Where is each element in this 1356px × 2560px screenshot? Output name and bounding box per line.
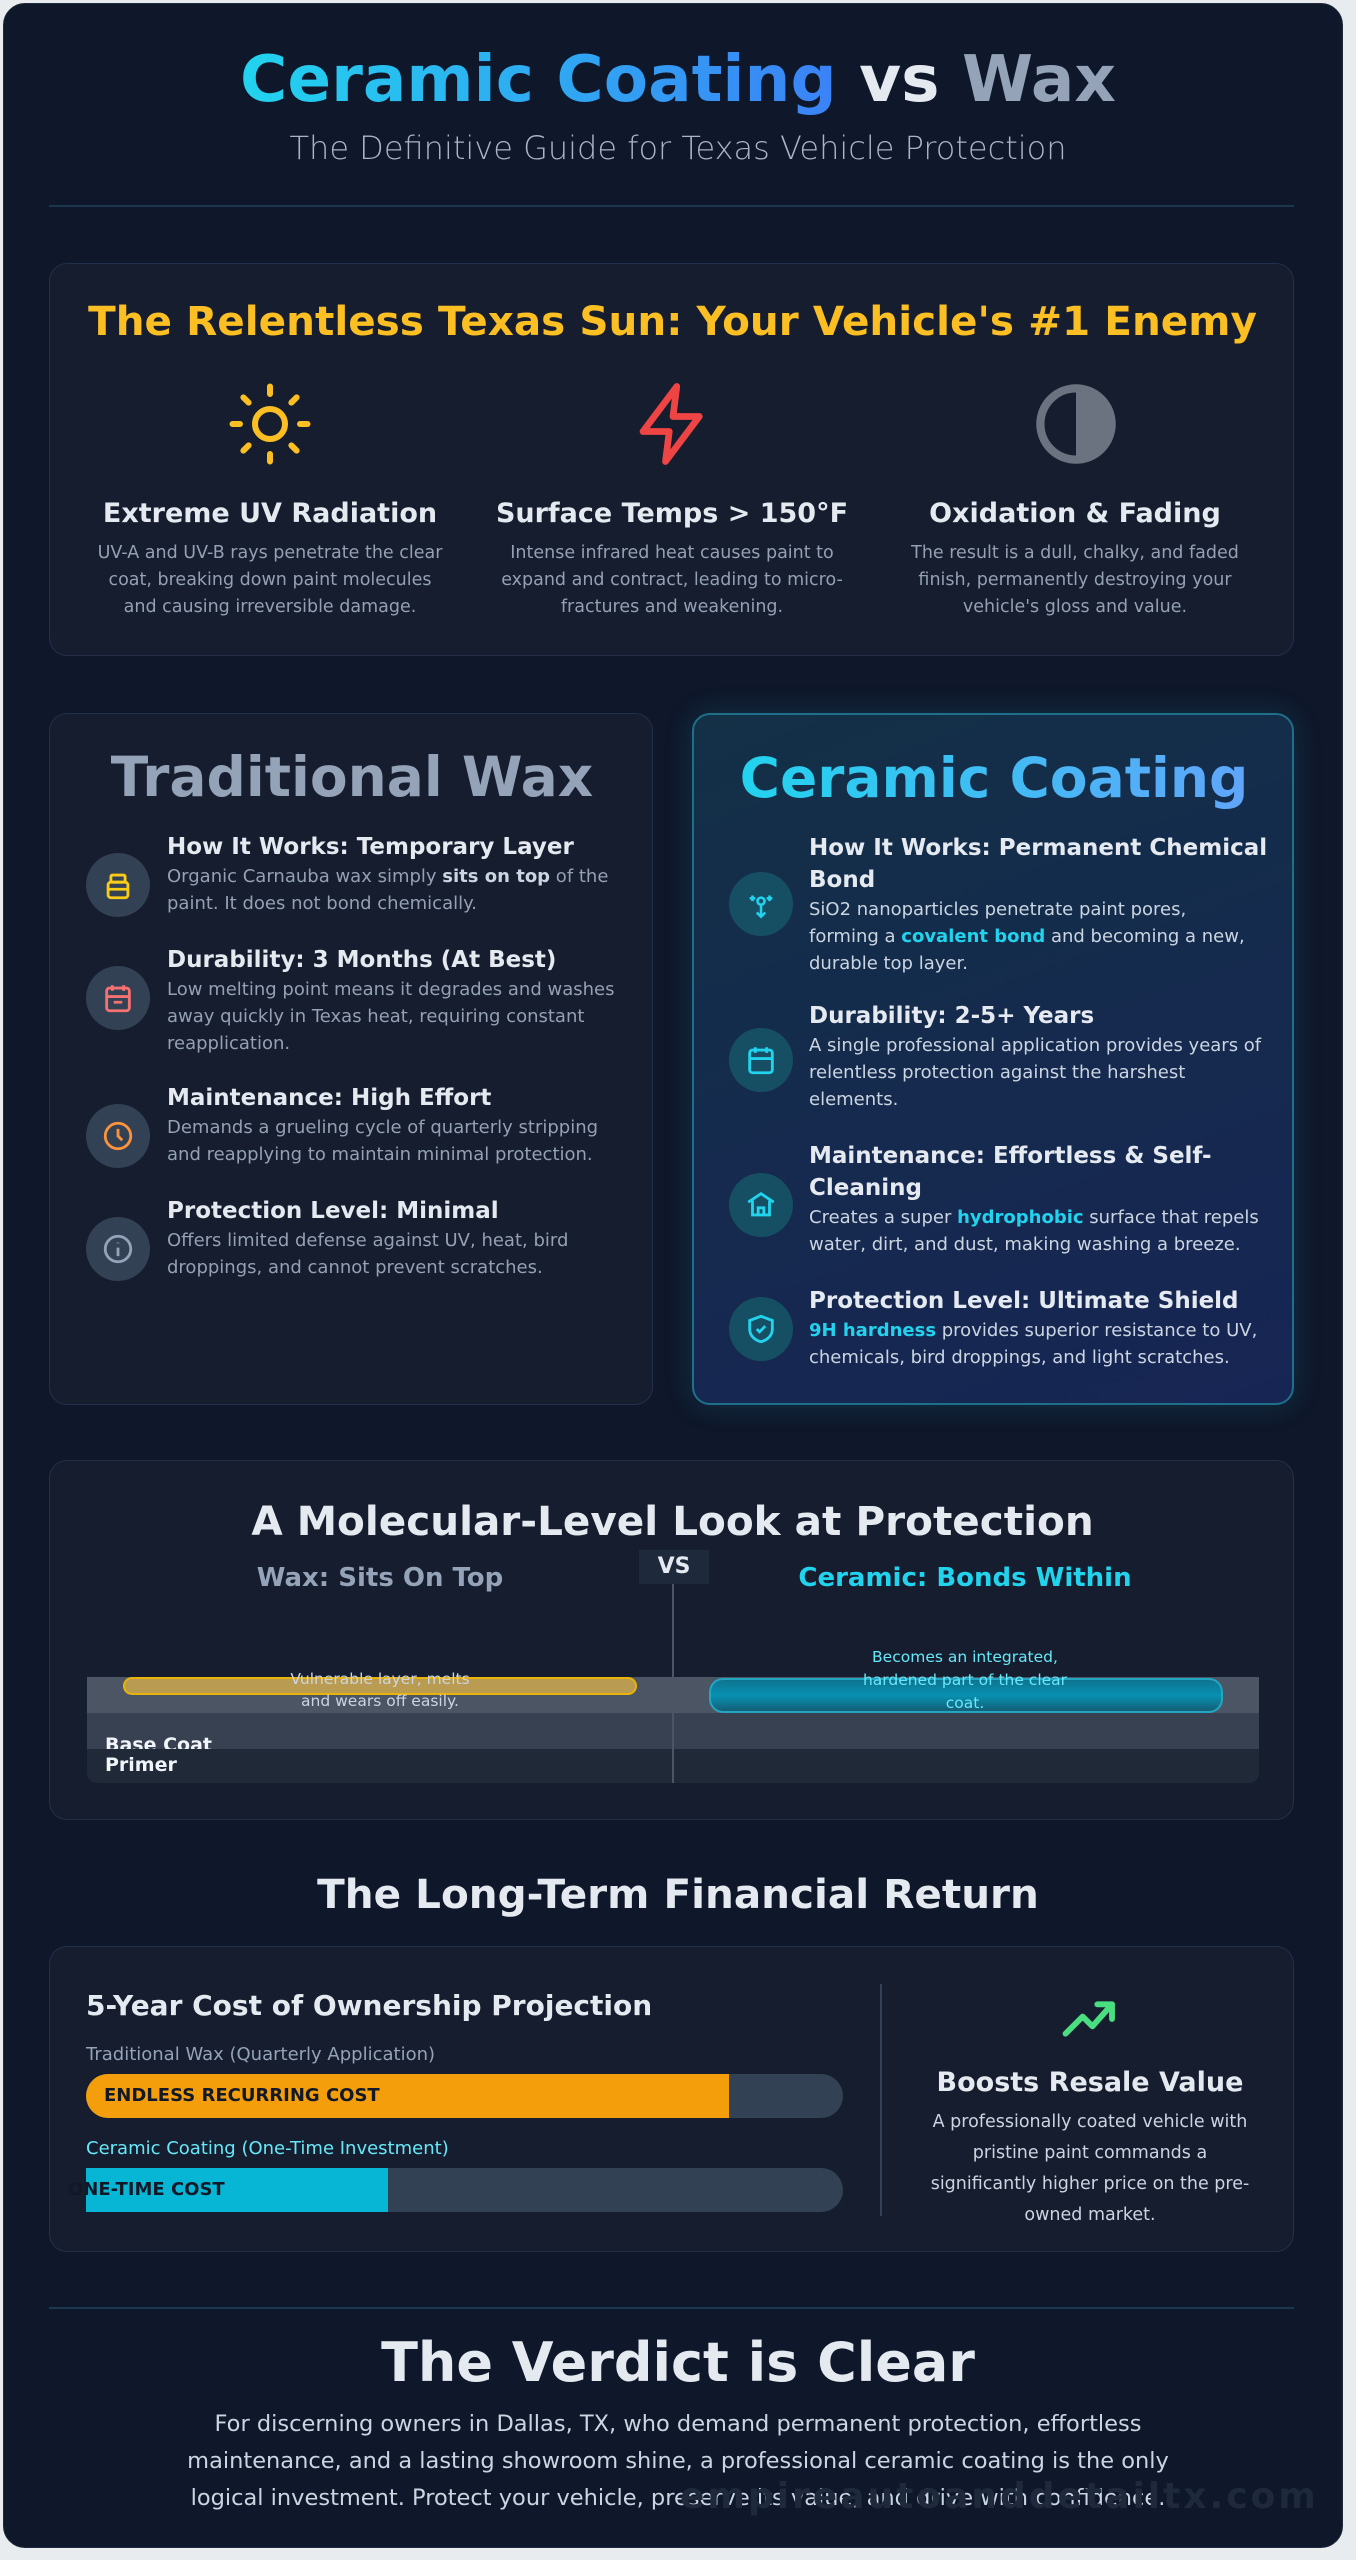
heading: wax: Traditional Wax: [111, 745, 593, 809]
item: UV: UV-A and UV-B rays penetrate the clear coat, breaking down paint molecules and causing irreversible damage.: [98, 543, 442, 617]
heading: molecular: A Molecular-Level Look at Protection: [251, 1497, 1094, 1545]
panel: molecular: [49, 1460, 1294, 1820]
panel: texas sun: [49, 263, 1294, 656]
item: UV: [98, 498, 442, 617]
heading: financial: The Long-Term Financial Return: [317, 1870, 1039, 1918]
ceramic item 2: A single professional application provides years of relentless protection against the harshest elements.: [809, 1035, 1261, 1110]
vs badge: [639, 1550, 709, 1584]
panel: financial: [49, 1946, 1294, 2252]
wax item 4: Offers limited defense against UV, heat, bird droppings, and cannot prevent scratches.: [167, 1230, 568, 1278]
wax bar: [123, 1677, 637, 1695]
ceramic item 2: Durability: 2-5+ Years: [809, 1003, 1094, 1029]
resale value: [931, 2001, 1249, 2225]
icon: trending up: [1062, 2001, 1115, 2037]
ceramic item 3: [729, 1143, 1259, 1255]
watermark: empireautoanddetailtx.com: [680, 2476, 1319, 2517]
wax item 3: [86, 1085, 598, 1168]
heading: ceramic: Ceramic Coating: [740, 746, 1248, 810]
ceramic item 1: SiO2 nanoparticles penetrate paint pores, forming a covalent bond and becoming a new, durable top layer.: [809, 899, 1245, 974]
icon: sun: [230, 384, 310, 464]
heading: sun: The Relentless Texas Sun: Your Vehicle's #1 Enemy: [88, 297, 1257, 345]
ceramic bar: [709, 1678, 1223, 1713]
wax item 1: How It Works: Temporary Layer: [167, 834, 574, 860]
item: temps: Surface Temps > 150°F: [496, 498, 848, 529]
chart: cost projection: ENDLESS RECURRING COST: [104, 2085, 380, 2106]
ceramic item 3: Maintenance: Effortless & Self-Cleaning: [809, 1143, 1212, 1201]
wax item 3: Maintenance: High Effort: [167, 1085, 491, 1111]
panel: ceramic coating: [692, 713, 1294, 1405]
wax item 4: [86, 1198, 568, 1281]
heading: verdict: The Verdict is Clear: [381, 2331, 975, 2394]
ceramic caption: Becomes an integrated, hardened part of the clear coat.: [863, 1648, 1067, 1712]
wax item 2: [86, 947, 614, 1054]
wax item 1: Organic Carnauba wax simply sits on top of the paint. It does not bond chemically.: [167, 866, 608, 914]
verdict paragraph: For discerning owners in Dallas, TX, who demand permanent protection, effortless maintenance, and a lasting showroom shine, a professional ceramic coating is the only logical investment. Protect your vehicle, preserve its value, and drive with confidence.: [187, 2411, 1169, 2511]
item: oxidation: [911, 498, 1239, 617]
ceramic item 4: Protection Level: Ultimate Shield: [809, 1288, 1239, 1314]
resale value: A professionally coated vehicle with pristine paint commands a significantly higher price on the pre-owned market.: [931, 2112, 1249, 2225]
ceramic item 3: Creates a super hydrophobic surface that repels water, dirt, and dust, making washing a breeze.: [809, 1207, 1259, 1255]
label: wax sits on top: Wax: Sits On Top: [257, 1563, 503, 1593]
layers diagram: [87, 1677, 1259, 1783]
wax item 4: Protection Level: Minimal: [167, 1198, 499, 1224]
item: temps: [496, 498, 848, 617]
panel: traditional wax: [49, 713, 653, 1405]
chart: cost projection: Traditional Wax (Quarterly Application): [86, 2044, 435, 2065]
ceramic item 1: How It Works: Permanent Chemical Bond: [809, 835, 1267, 893]
subtitle: The Definitive Guide for Texas Vehicle Protection: [289, 129, 1066, 167]
item: temps: Intense infrared heat causes paint to expand and contract, leading to micro-fractures and weakening.: [501, 543, 843, 617]
chart: cost projection: 5-Year Cost of Ownership Projection: [86, 1989, 652, 2022]
layers diagram: Primer: [105, 1754, 177, 1776]
icon: lightning: [640, 383, 703, 465]
resale value: Boosts Resale Value: [937, 2067, 1243, 2098]
item: UV: Extreme UV Radiation: [103, 498, 437, 529]
wax item 2: Low melting point means it degrades and washes away quickly in Texas heat, requiring constant reapplication.: [167, 979, 614, 1054]
label: ceramic bonds within: Ceramic: Bonds Within: [798, 1563, 1132, 1593]
wax item 1: [86, 834, 608, 917]
wax caption: Vulnerable layer, melts and wears off easily.: [290, 1670, 470, 1710]
title: Ceramic Coating vs Wax: [240, 42, 1116, 117]
icon: half circle: [1036, 384, 1116, 464]
ceramic item 4: [729, 1288, 1257, 1368]
ceramic item 1: [729, 835, 1267, 974]
item: oxidation: The result is a dull, chalky, and faded finish, permanently destroying your vehicle's gloss and value.: [911, 543, 1239, 617]
chart: cost projection: Ceramic Coating (One-Time Investment): [86, 2138, 449, 2159]
ceramic item 4: 9H hardness provides superior resistance to UV, chemicals, bird droppings, and light scratches.: [809, 1320, 1257, 1368]
wax item 3: Demands a grueling cycle of quarterly stripping and reapplying to maintain minimal protection.: [167, 1117, 598, 1165]
vertical divider: [672, 1583, 674, 1783]
vs badge: VS: [658, 1554, 690, 1579]
ceramic item 2: [729, 1003, 1262, 1110]
chart: cost projection: [68, 1989, 843, 2212]
wax item 2: Durability: 3 Months (At Best): [167, 947, 556, 973]
item: oxidation: Oxidation & Fading: [929, 498, 1221, 529]
chart: cost projection: ONE-TIME COST: [68, 2179, 225, 2200]
